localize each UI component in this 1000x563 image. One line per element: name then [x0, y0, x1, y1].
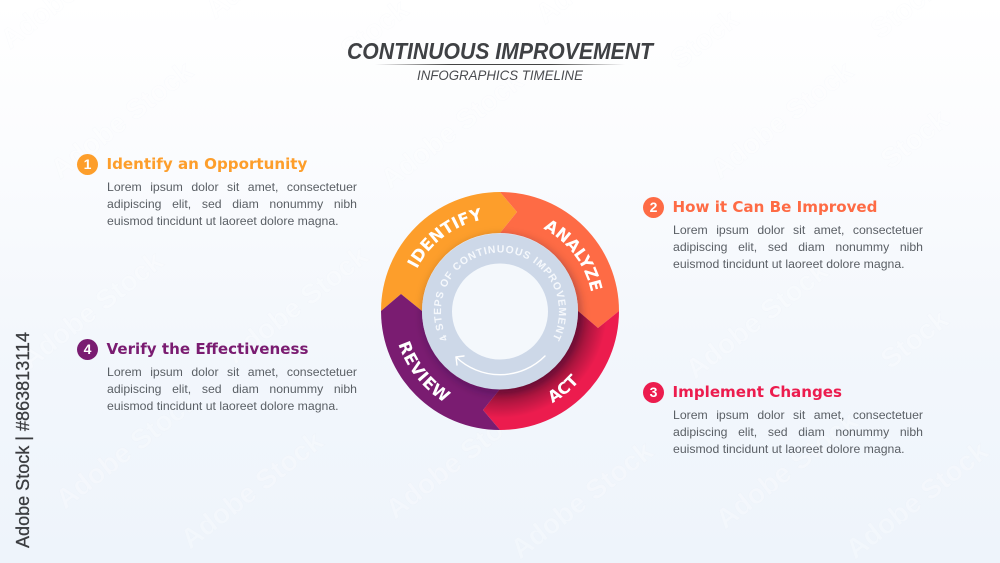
watermark pattern: Adobe Stock [710, 405, 864, 535]
number badge 1 [77, 154, 98, 175]
number badge 2 [643, 197, 664, 218]
inner ring [422, 234, 578, 390]
watermark pattern: Adobe Stock [15, 245, 169, 375]
watermark pattern: Adobe Stock [375, 65, 529, 195]
segment: act [483, 311, 619, 430]
body text 2 [673, 223, 923, 271]
watermark pattern: Adobe Stock [45, 55, 199, 185]
watermark pattern: Adobe Stock [705, 55, 859, 185]
number badge 4: 4 [84, 341, 91, 357]
watermark pattern: Stock [875, 303, 954, 375]
center hole [452, 264, 548, 360]
body text 1: adipiscing elit, sed diam nonummy nibh [107, 197, 357, 211]
body text 3 [673, 408, 923, 456]
label: analyze: ANALYZE [543, 220, 602, 292]
watermark pattern: Adobe Stock [50, 385, 204, 515]
watermark pattern: Adobe Stock [680, 255, 834, 385]
stock credit: Adobe Stock | #863813114 [13, 332, 33, 548]
main title: CONTINUOUS IMPROVEMENT [347, 38, 655, 64]
body text 2: euismod tincidunt ut laoreet dolore magna. [673, 257, 905, 271]
segment: analyze [500, 192, 619, 328]
body text 1: Lorem ipsum dolor sit amet, consectetuer [107, 180, 357, 194]
watermark pattern: Adobe Stock [505, 435, 659, 563]
watermark pattern: Stock [875, 103, 954, 175]
number badge 2: 2 [650, 199, 657, 215]
body text 3: euismod tincidunt ut laoreet dolore magna. [673, 442, 905, 456]
heading 1: Identify an Opportunity [106, 155, 307, 173]
number badge 4 [77, 339, 98, 360]
arrow: cycle direction [456, 356, 545, 375]
watermark pattern: Adobe Stock [220, 240, 374, 370]
panel: step 4 review [77, 339, 357, 413]
body text 4: euismod tincidunt ut laoreet dolore magna. [107, 399, 339, 413]
panel: step 3 act [643, 382, 923, 456]
panel: step 1 identify [77, 154, 357, 228]
label: identify: IDENTIFY [407, 208, 480, 268]
body text 4 [107, 365, 357, 413]
ring caption: 4 STEPS OF CONTINUOUS IMPROVEMENT [434, 245, 566, 342]
label: act: ACT [550, 373, 577, 404]
body text 4: Lorem ipsum dolor sit amet, consectetuer [107, 365, 357, 379]
label: review: REVIEW [398, 341, 452, 401]
segment: review [381, 294, 500, 430]
segment: identify [381, 192, 517, 311]
body text 3: Lorem ipsum dolor sit amet, consectetuer [673, 408, 923, 422]
heading 3: Implement Changes [672, 383, 842, 401]
body text 1: euismod tincidunt ut laoreet dolore magna. [107, 214, 339, 228]
watermark pattern: Adobe Stock [840, 435, 994, 563]
panel: step 2 analyze [643, 197, 923, 271]
number badge 1: 1 [84, 156, 91, 172]
subtitle: INFOGRAPHICS TIMELINE [417, 67, 584, 83]
watermark pattern: Stock [665, 3, 744, 75]
watermark pattern: Adobe Stock [175, 425, 329, 555]
body text 1 [107, 180, 357, 228]
body text 2: adipiscing elit, sed diam nonummy nibh [673, 240, 923, 254]
body text 3: adipiscing elit, sed diam nonummy nibh [673, 425, 923, 439]
heading 4: Verify the Effectiveness [106, 340, 308, 358]
watermark pattern: Adobe Stock [380, 395, 534, 525]
body text 2: Lorem ipsum dolor sit amet, consectetuer [673, 223, 923, 237]
body text 4: adipiscing elit, sed diam nonummy nibh [107, 382, 357, 396]
heading 2: How it Can Be Improved [672, 198, 877, 216]
number badge 3 [643, 382, 664, 403]
number badge 3: 3 [650, 384, 657, 400]
